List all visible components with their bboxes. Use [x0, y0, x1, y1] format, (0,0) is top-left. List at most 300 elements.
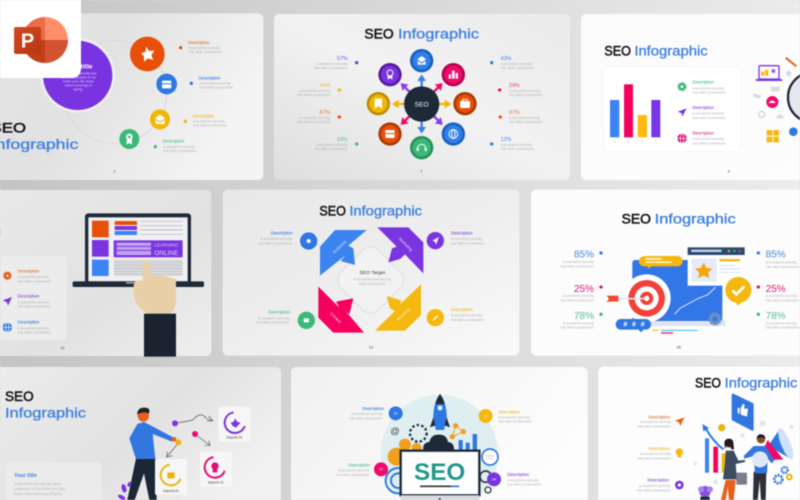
growth bars — [705, 438, 726, 473]
step 02: Description — [348, 463, 371, 468]
your title panel: possession of my entire soul, like — [14, 487, 65, 491]
legend item purple — [678, 105, 726, 120]
aspect card 02 — [200, 452, 232, 487]
pink chat icon — [766, 96, 778, 108]
plant — [117, 481, 132, 500]
center diamond — [333, 242, 408, 318]
woman — [721, 439, 747, 500]
stat left 78%: A wonderful serenity — [563, 321, 594, 325]
aspect card 03: Aspects 03 — [227, 435, 242, 439]
stat 12% — [490, 137, 534, 151]
title: SEO — [5, 389, 34, 404]
stat left 25%: A wonderful serenity — [563, 294, 594, 298]
monitor — [401, 451, 479, 500]
underline strokes — [652, 329, 659, 332]
title — [0, 120, 79, 152]
gears — [480, 471, 491, 493]
learning online banner — [114, 240, 183, 257]
page number: 13 — [369, 345, 374, 350]
description: purple: Description — [451, 230, 473, 235]
stat 57%: A wonderful serenity — [316, 62, 348, 66]
page number: 11 — [61, 345, 66, 350]
description orange: A wonderful serenity — [640, 420, 671, 424]
slide: SEO target arrows — [223, 190, 519, 356]
SEO hub circle: SEO — [415, 101, 429, 108]
step 03: A wonderful serenity — [498, 415, 530, 419]
title — [695, 375, 798, 390]
stat right 25%: 25% — [766, 284, 786, 295]
description: blue: A wonderful serenity — [199, 81, 231, 85]
stat 57%: 57% — [337, 56, 348, 62]
stat left 25%: 25% — [574, 284, 594, 295]
icon: globe node — [442, 122, 465, 146]
aspect card 03 — [218, 407, 250, 442]
stat 12%: has taken possession — [501, 147, 534, 151]
icon: bookmark node — [367, 92, 390, 115]
page number: 26 — [676, 345, 682, 350]
stat left 78%: 78% — [574, 311, 594, 322]
center diamond: SEO Target — [359, 270, 386, 276]
hashtag pill: # — [632, 322, 636, 329]
stat right 78%: A wonderful serenity — [766, 321, 797, 325]
item purple: Description — [18, 294, 40, 299]
check badge — [725, 277, 751, 306]
description: blue: has taken possession — [199, 85, 233, 89]
coins — [388, 439, 422, 466]
arrow: branding: Branding — [396, 307, 411, 322]
legend item purple: A wonderful serenity — [692, 112, 724, 116]
title — [622, 211, 736, 226]
item blue — [3, 320, 51, 335]
stat 87%: has taken possession — [297, 120, 330, 124]
step 02 — [336, 462, 388, 477]
purple title circle: Your title — [64, 64, 93, 71]
SEO hub circle — [404, 86, 439, 122]
description: orange: has taken possession — [189, 50, 222, 54]
chart panel — [603, 67, 741, 151]
slide: bar chart — [581, 14, 800, 180]
icon: green award — [119, 129, 139, 149]
description: blue: Description — [271, 230, 293, 235]
connector yellow — [167, 439, 181, 457]
legend item green: A wonderful serenity — [692, 86, 724, 90]
description yellow — [637, 446, 683, 460]
coin — [718, 424, 725, 431]
arrow: branding — [375, 284, 421, 331]
purple title circle — [40, 38, 115, 113]
stat 12%: 12% — [501, 137, 512, 143]
arrow: marketing — [377, 227, 423, 273]
stat 43% — [490, 56, 534, 70]
step 03: 03 — [484, 414, 488, 418]
legend item purple: has taken possession — [692, 116, 726, 120]
blue round icon — [789, 127, 798, 136]
slide card — [598, 367, 800, 500]
description: blue: Description — [199, 76, 221, 81]
stat left 78%: has taken possession — [560, 326, 594, 330]
stat 97% — [499, 110, 543, 124]
globe — [381, 395, 498, 500]
pointing hand — [133, 260, 176, 357]
purple title circle: A wonderful serenity has — [60, 72, 97, 76]
item orange: Description — [18, 268, 40, 273]
at sign: @ — [390, 426, 400, 436]
step 04: A wonderful serenity — [507, 478, 539, 482]
illustration: SEO dashboard — [753, 58, 800, 142]
description: green: has taken possession — [163, 149, 197, 153]
stat left 85%: has taken possession — [560, 264, 594, 268]
slide card — [581, 14, 800, 180]
stat right 85%: has taken possession — [766, 265, 799, 269]
description: blue — [258, 230, 317, 250]
slide: learning online — [0, 190, 211, 357]
stat left 25% — [560, 284, 603, 302]
stat 24%: has taken possession — [509, 93, 543, 97]
blue bars — [459, 434, 477, 452]
title: SEO — [622, 211, 651, 226]
center diamond: taken possession — [359, 282, 386, 286]
stat 44%: has taken possession — [297, 93, 330, 97]
legend item pink: has taken possession — [692, 141, 726, 145]
icon: orange star — [130, 37, 165, 71]
purple title circle: entire soul, like these — [63, 80, 94, 84]
title — [364, 26, 479, 41]
icon: chart node — [442, 63, 465, 86]
ring gauge — [788, 72, 800, 123]
slide: SEO hub — [274, 14, 570, 180]
description orange: has taken possession — [637, 424, 671, 428]
screen blocks — [92, 221, 183, 276]
page number: 4 — [728, 168, 731, 173]
description orange — [637, 414, 684, 428]
description: green — [256, 310, 315, 329]
stat left 78% — [560, 311, 603, 330]
stat 34% — [314, 137, 358, 151]
stat 43%: A wonderful serenity — [501, 62, 532, 66]
gear — [709, 313, 721, 325]
purple title circle: taken possession of my — [61, 76, 96, 80]
slide: target illustration — [531, 190, 800, 356]
yellow grid icon — [767, 130, 779, 142]
stat 44%: A wonderful serenity — [299, 89, 331, 93]
item blue: Description — [18, 320, 40, 325]
stat left 85%: 85% — [574, 250, 594, 261]
description: yellow: Description — [193, 113, 215, 118]
arrow: marketing: Marketing — [398, 236, 414, 252]
title — [5, 389, 86, 421]
legend item green: Description — [692, 80, 715, 85]
description: orange: Description — [188, 40, 210, 45]
rating window — [688, 247, 745, 286]
icon: briefcase node — [453, 92, 477, 115]
step 01: Description — [362, 406, 385, 411]
description: green: A wonderful serenity — [163, 145, 195, 149]
your title panel: A wonderful serenity has taken — [14, 482, 62, 486]
slide card — [274, 14, 570, 180]
stat 97%: A wonderful serenity — [509, 116, 541, 120]
description purple: Description — [647, 478, 670, 483]
description: green — [154, 139, 197, 153]
step 01: has taken possession — [349, 416, 383, 420]
hub arrows — [392, 74, 451, 134]
step 04 — [487, 472, 541, 487]
stat 34%: has taken possession — [314, 147, 348, 151]
icon: mail node — [410, 49, 433, 72]
hashtag pill: # — [641, 322, 645, 329]
slide card — [0, 367, 281, 500]
purple title circle: sweet mornings of — [65, 84, 92, 88]
description: green: Description — [163, 139, 185, 144]
stat right 85%: A wonderful serenity — [766, 261, 797, 265]
bar chart: 1 — [655, 140, 657, 144]
description: blue: A wonderful serenity — [261, 237, 292, 241]
chat ring — [482, 449, 498, 465]
yellow bubble — [639, 256, 683, 269]
step 01: A wonderful serenity — [351, 412, 383, 416]
description: blue: has taken possession — [258, 241, 292, 245]
hashtag pill: # — [623, 322, 627, 329]
slide: circle process — [0, 13, 263, 180]
laptop icon — [756, 66, 782, 81]
stat 44%: 44% — [320, 83, 331, 89]
title: SEO — [319, 204, 346, 219]
stat right 25%: A wonderful serenity — [766, 294, 797, 298]
description: green: Description — [268, 310, 291, 315]
description: yellow: Description — [451, 307, 473, 312]
bar chart: 5 — [627, 140, 629, 144]
small grey icons — [753, 71, 791, 118]
PowerPoint logo: P — [21, 30, 34, 52]
thumbs up badge — [733, 395, 752, 429]
arrow: content: Content — [329, 311, 343, 325]
icon: award node — [378, 63, 402, 86]
aspect card 01 — [155, 459, 187, 495]
monitor: SEO — [414, 459, 465, 486]
legend item green — [678, 80, 726, 95]
stat right 78%: 78% — [766, 311, 786, 322]
legend item pink — [677, 131, 726, 145]
description: orange — [179, 40, 222, 54]
description: orange: A wonderful serenity — [189, 46, 220, 50]
rocket — [430, 394, 450, 430]
step 04: 04 — [492, 478, 496, 482]
item purple — [3, 294, 51, 309]
bar chart: 4 — [614, 140, 616, 144]
description: green: A wonderful serenity — [258, 316, 290, 320]
PowerPoint badge — [0, 0, 81, 78]
decorative dots — [694, 420, 794, 484]
description: purple — [427, 230, 485, 249]
slide card — [291, 367, 588, 500]
description: purple: has taken possession — [451, 241, 485, 245]
title: SEO — [364, 26, 394, 41]
item blue: A wonderful serenity — [18, 326, 49, 330]
step 03: Description — [498, 409, 521, 414]
description yellow: A wonderful serenity — [640, 452, 671, 456]
learning online banner: LEARNING — [154, 243, 179, 248]
slide: aspects — [0, 367, 281, 500]
stat right 85%: 85% — [766, 250, 786, 261]
description: yellow: A wonderful serenity — [451, 314, 483, 318]
man — [744, 434, 774, 500]
rings target — [386, 468, 411, 493]
item orange: has taken possession — [18, 279, 51, 283]
description: green: has taken possession — [256, 321, 289, 325]
title: SEO — [695, 375, 721, 390]
title: Infographic — [655, 211, 736, 226]
connector purple — [172, 415, 213, 426]
item purple: has taken possession — [18, 305, 51, 309]
aspect card 01: Aspects 01 — [163, 489, 179, 493]
stat 43%: has taken possession — [501, 66, 534, 70]
learning online banner: ONLINE — [154, 250, 179, 257]
slide: SEO rocket — [291, 367, 588, 500]
bar chart — [610, 84, 660, 144]
white corner tab — [0, 0, 81, 78]
megaphone — [763, 426, 796, 461]
stat right 78%: has taken possession — [766, 326, 799, 330]
step 03 — [479, 409, 532, 424]
description: blue — [190, 76, 233, 89]
slide card — [223, 190, 519, 356]
stat right 25%: has taken possession — [766, 298, 799, 302]
legend item purple: Description — [692, 105, 715, 110]
cloud — [423, 435, 454, 451]
step 04: Description — [507, 472, 530, 477]
stat left 85% — [560, 250, 603, 268]
clock — [410, 425, 427, 442]
laptop base — [649, 321, 726, 326]
target — [623, 274, 671, 322]
icon: calendar node — [378, 122, 402, 146]
your title panel — [6, 463, 102, 500]
laptop — [73, 213, 204, 287]
description yellow: has taken possession — [637, 456, 671, 460]
item purple: A wonderful serenity — [18, 300, 49, 304]
description: yellow: A wonderful serenity — [193, 120, 225, 124]
slide card — [531, 190, 800, 356]
description yellow: Description — [648, 446, 671, 451]
step 02: has taken possession — [336, 473, 369, 477]
stat 34%: A wonderful serenity — [316, 143, 348, 147]
growth arrow — [702, 424, 723, 449]
title — [604, 44, 708, 59]
slide: business handshake — [598, 367, 800, 500]
stat 87% — [297, 110, 341, 124]
description: yellow — [427, 307, 485, 326]
title: Infographic — [634, 44, 708, 59]
item blue: has taken possession — [18, 331, 51, 335]
step 02: 02 — [379, 468, 383, 472]
stat 57% — [314, 56, 358, 70]
step 03: has taken possession — [498, 420, 532, 424]
stat 24%: A wonderful serenity — [509, 89, 541, 93]
description: purple: A wonderful serenity — [451, 237, 483, 241]
your title panel: Your title — [14, 473, 37, 479]
stat 24% — [498, 83, 543, 97]
title: Infographic — [5, 406, 86, 421]
title: Infographic — [349, 204, 422, 219]
trend line — [674, 287, 716, 314]
stat 24%: 24% — [509, 83, 520, 89]
hashtag pill — [616, 319, 651, 332]
stat 43%: 43% — [501, 56, 512, 62]
description orange: Description — [648, 414, 671, 419]
slide card — [0, 190, 211, 356]
description: yellow — [184, 113, 227, 128]
orbit ring — [63, 40, 167, 144]
stat 87%: A wonderful serenity — [299, 116, 331, 120]
blue browser — [632, 260, 722, 323]
legend item green: has taken possession — [692, 91, 726, 95]
slide card — [0, 13, 263, 180]
step 01 — [349, 406, 403, 420]
step 02: A wonderful serenity — [338, 469, 370, 473]
stat left 25%: has taken possession — [560, 298, 594, 302]
title: Infographic — [725, 375, 798, 390]
bar chart: 3 — [641, 140, 643, 144]
description: yellow: has taken possession — [193, 124, 227, 128]
title: Infographic — [398, 26, 479, 41]
step 04: has taken possession — [507, 483, 541, 487]
legend item pink: A wonderful serenity — [692, 137, 724, 141]
stat 57%: has taken possession — [314, 66, 348, 70]
page number: 2 — [114, 168, 117, 173]
title — [319, 204, 422, 219]
dart — [607, 296, 646, 302]
network nodes — [450, 423, 466, 439]
step 01: 01 — [394, 412, 398, 416]
stat 97%: 97% — [509, 110, 520, 116]
description purple: has taken possession — [637, 488, 670, 492]
stat 34%: 34% — [337, 137, 348, 143]
center diamond: A wonderful serenity has — [353, 278, 392, 282]
stat left 85%: A wonderful serenity — [563, 260, 594, 264]
arrow: analysing — [320, 230, 367, 276]
stat 12%: A wonderful serenity — [501, 143, 532, 147]
legend item pink: Description — [692, 131, 715, 136]
description purple — [637, 478, 682, 492]
description purple: A wonderful serenity — [639, 484, 671, 488]
aspect card 02: Aspects 02 — [208, 481, 224, 485]
your title panel: these sweet mornings of spring — [14, 492, 62, 496]
stat right 78% — [757, 311, 799, 330]
stat right 25% — [757, 284, 799, 302]
connector pink — [192, 431, 210, 445]
icon: headset node — [410, 136, 433, 159]
page number: 7 — [420, 169, 423, 174]
stat 97%: has taken possession — [509, 120, 543, 124]
icon: yellow mail — [150, 109, 170, 129]
item orange — [4, 268, 51, 283]
stat right 85% — [757, 250, 799, 269]
arrow: content — [318, 287, 364, 333]
person — [127, 408, 176, 500]
description: yellow: has taken possession — [451, 318, 485, 322]
stat 44% — [297, 83, 341, 97]
SEO illustration — [607, 247, 751, 333]
item orange: A wonderful serenity — [18, 275, 49, 279]
orange pencil — [786, 58, 796, 66]
purple title circle: spring. — [73, 88, 83, 92]
icon: blue calendar — [156, 74, 177, 94]
description panel — [0, 256, 67, 340]
gears — [774, 467, 792, 483]
arrow: analysing: Analysing — [331, 239, 347, 255]
stat 87%: 87% — [320, 110, 331, 116]
potted plant — [698, 486, 713, 500]
title: SEO — [604, 44, 631, 59]
